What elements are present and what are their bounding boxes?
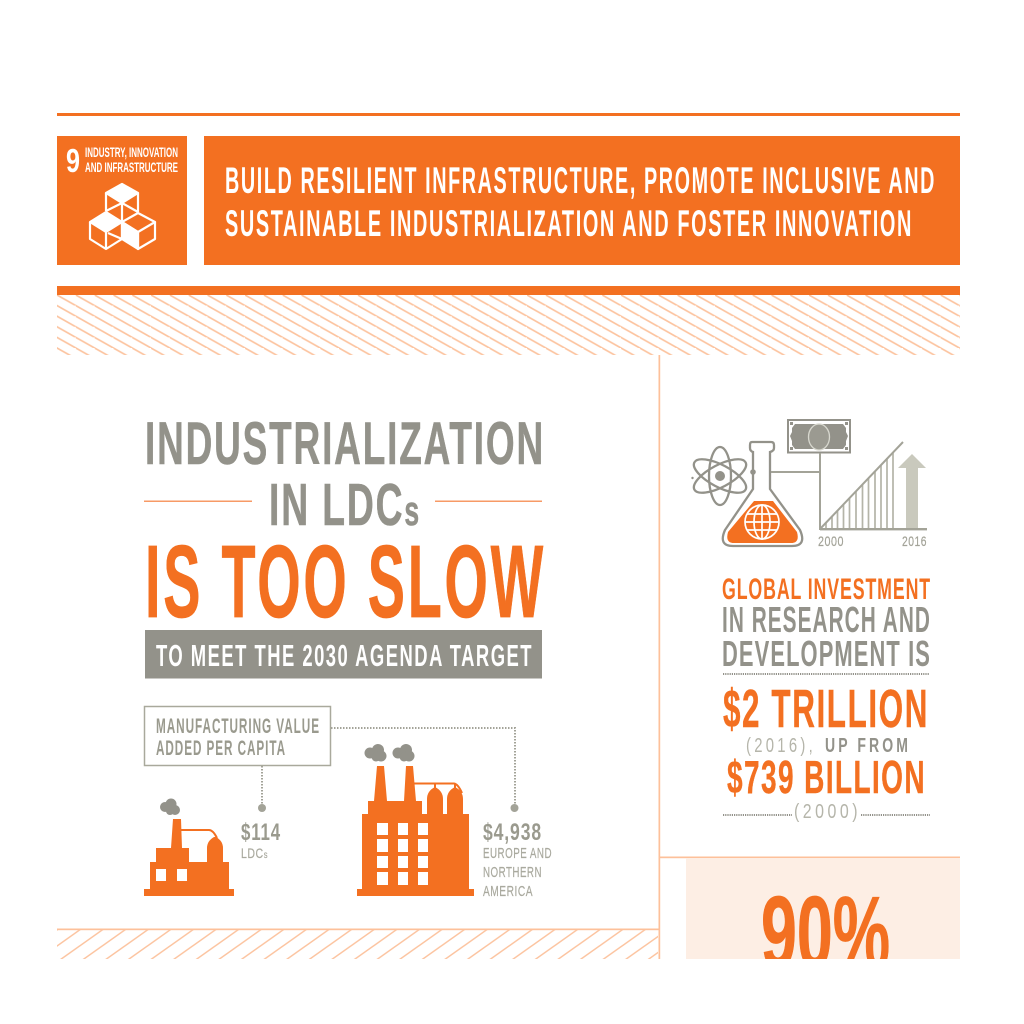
growth chart 2000 to 2016: 2016 xyxy=(902,533,927,549)
icon: banknote xyxy=(788,420,850,452)
icon: cubes xyxy=(90,184,155,249)
value: Europe and Northern America: NORTHERN xyxy=(483,865,542,881)
value: Europe and Northern America: EUROPE AND xyxy=(483,846,552,862)
manufacturing value callout xyxy=(144,706,330,766)
growth chart 2000 to 2016 xyxy=(771,442,927,549)
growth chart 2000 to 2016: 2000 xyxy=(818,533,844,549)
headline: INDUSTRIALIZATION xyxy=(145,410,545,477)
dotted connectors xyxy=(258,728,518,812)
goal name xyxy=(85,145,178,175)
headline: IS TOO SLOW xyxy=(145,524,546,639)
R&D investment figures: (2016), xyxy=(746,735,816,757)
value: Europe and Northern America: $4,938 xyxy=(483,819,542,846)
infographic xyxy=(57,113,960,959)
icon: atom xyxy=(689,447,751,505)
value: Europe and Northern America: AMERICA xyxy=(483,884,533,900)
goal title banner xyxy=(204,136,960,265)
R&D investment figures xyxy=(723,679,929,823)
value: LDCs: LDCs xyxy=(241,845,268,861)
headline xyxy=(144,410,546,639)
value: LDCs: $114 xyxy=(241,819,281,846)
value: LDCs xyxy=(241,819,281,861)
panel: 90% xyxy=(686,858,960,959)
icon: small factory xyxy=(144,798,234,896)
R&D investment figures: (2000) xyxy=(794,801,861,823)
goal number: 9 xyxy=(66,142,80,179)
manufacturing value callout: ADDED PER CAPITA xyxy=(156,737,286,760)
panel: 90%: 90% xyxy=(761,875,890,990)
value: Europe and Northern America xyxy=(483,819,552,900)
goal 9 badge xyxy=(57,136,187,265)
R&D heading xyxy=(722,573,931,674)
headline: IN LDCs xyxy=(269,472,421,538)
icon: large factory xyxy=(357,744,474,896)
agenda target banner: TO MEET THE 2030 AGENDA TARGET xyxy=(156,638,533,673)
icon: flask with globe xyxy=(723,442,802,546)
R&D investment figures: UP FROM xyxy=(825,735,911,757)
agenda target banner xyxy=(145,630,542,678)
goal name: INDUSTRY, INNOVATION xyxy=(85,145,178,160)
goal name: AND INFRASTRUCTURE xyxy=(85,160,178,175)
manufacturing value callout: MANUFACTURING VALUE xyxy=(156,715,320,738)
